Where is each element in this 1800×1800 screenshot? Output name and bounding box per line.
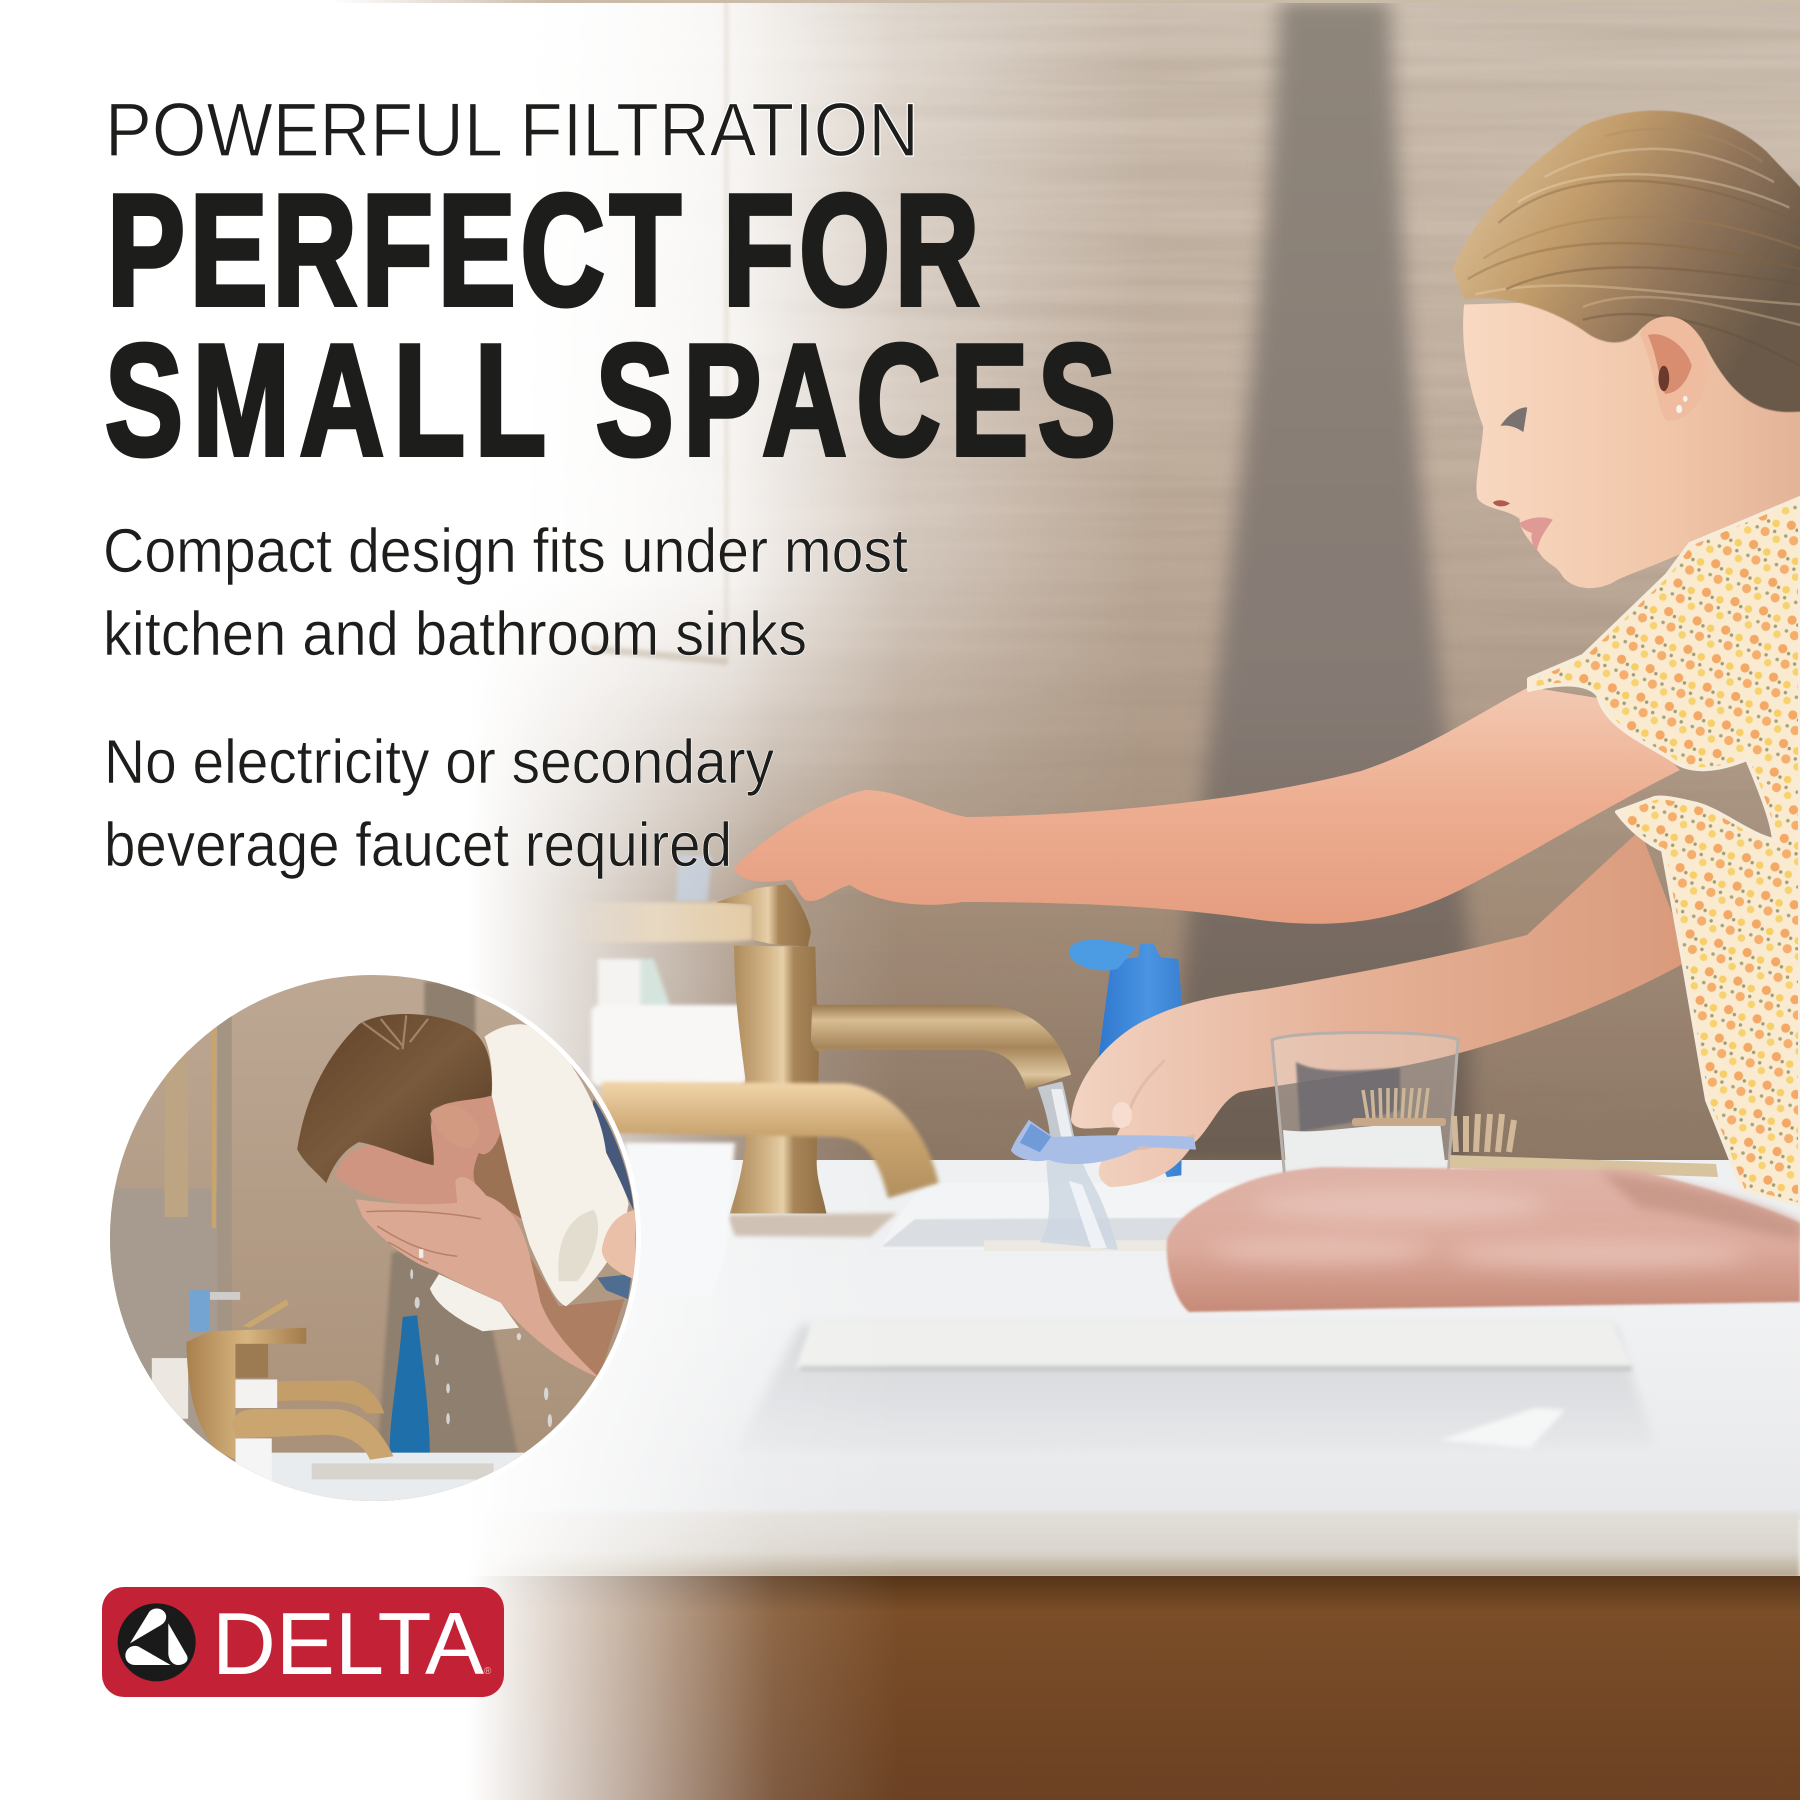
inset man's arm and hands (355, 1177, 624, 1378)
background wall (0, 0, 1800, 1170)
blue toothbrush (1011, 1120, 1196, 1164)
inset blue tube (390, 1315, 430, 1458)
second toothbrush on counter (1450, 1114, 1718, 1177)
benefit 2 (104, 728, 774, 880)
inset white container (152, 1358, 188, 1419)
eye (1500, 407, 1527, 432)
main heading line 2: SMALL SPACES (105, 312, 1125, 489)
girl's dress (1529, 498, 1800, 1205)
white toiletry jar (591, 856, 747, 1085)
inset towel (430, 1024, 629, 1331)
foreground cup (625, 1143, 735, 1300)
inset tile and mirror (110, 1016, 232, 1452)
Delta logo (102, 1587, 504, 1697)
inset water drops (410, 1269, 552, 1427)
inset photo white ring (105, 970, 641, 1506)
hair (1453, 111, 1800, 412)
faucet lever bar (560, 902, 753, 943)
logo triangle mark (118, 1603, 196, 1681)
faucet (560, 884, 1071, 1213)
girl's upper arm and hand (734, 687, 1680, 924)
countertop front edge (0, 1512, 1800, 1578)
inset man's ear (430, 1106, 441, 1120)
face and neck (1463, 284, 1800, 588)
front sink basin (735, 1322, 1655, 1452)
top edge strip (330, 0, 1800, 3)
mirror panel edge (590, 0, 728, 665)
faucet reflection on counter (727, 1213, 897, 1237)
inset toothbrush (190, 1290, 240, 1331)
pink towel (1167, 1167, 1800, 1312)
inset man's face (335, 1096, 524, 1221)
back sink basin (881, 1183, 1260, 1251)
inset faucet front (186, 1328, 394, 1460)
inset wall (110, 975, 636, 1501)
wood cabinet (0, 1576, 1800, 1800)
nostril and lips (1493, 500, 1553, 552)
title (105, 88, 1125, 489)
girl's head (1453, 111, 1800, 588)
inset foreground shoulder (602, 1210, 635, 1280)
benefit text (103, 517, 908, 880)
girl's lower arm and hand (1071, 830, 1690, 1187)
inset man's hair (297, 1014, 492, 1183)
benefit 1: Compact design fits under most (103, 517, 908, 586)
blue bottle (1069, 940, 1183, 1177)
inset man's shirt (593, 1099, 633, 1299)
foreground blurred spout (601, 1081, 939, 1198)
benefit 1 (103, 517, 908, 669)
faucet body (730, 946, 827, 1213)
inset curtain (377, 981, 519, 1460)
main heading line 1: PERFECT FOR (107, 162, 984, 339)
registered mark: ® (484, 1666, 492, 1677)
water stream (1038, 1081, 1118, 1250)
benefit 2: beverage faucet required (104, 811, 732, 880)
ear (1640, 316, 1708, 421)
logo wordmark: DELTA (212, 1594, 484, 1693)
faucet spout (811, 1005, 1071, 1090)
faucet knob (716, 884, 811, 947)
inset white jars (235, 1379, 277, 1481)
vanity countertop (0, 1160, 1800, 1520)
logo red badge (102, 1587, 504, 1697)
benefit 2: No electricity or secondary (104, 728, 774, 797)
eyebrow heading: POWERFUL FILTRATION (105, 88, 919, 173)
benefit 1: kitchen and bathroom sinks (103, 600, 807, 669)
inset counter (268, 1452, 524, 1501)
shower curtain (1170, 0, 1470, 1165)
inset circular photo: man washing face (110, 975, 636, 1501)
inset faucet rear (235, 1299, 384, 1413)
hair strands (1468, 129, 1800, 366)
drinking glass with toothbrush (1272, 1032, 1458, 1180)
upper mirror white fade (495, 3, 1095, 864)
